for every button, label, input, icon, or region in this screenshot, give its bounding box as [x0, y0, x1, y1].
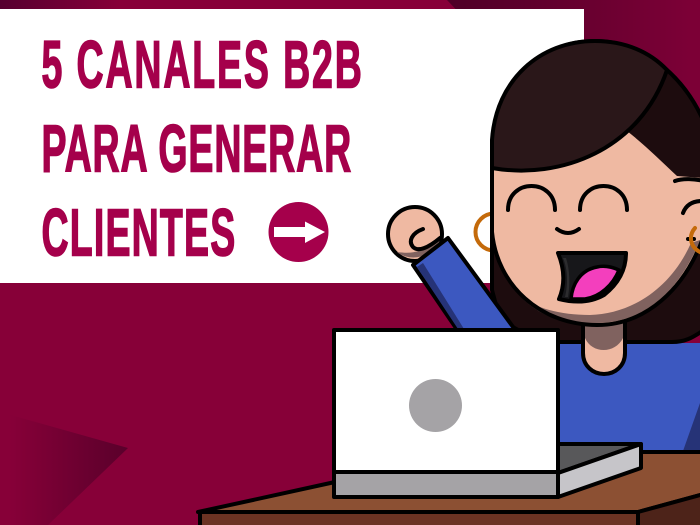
face shadow	[520, 240, 700, 323]
desk side	[638, 494, 700, 525]
raised arm	[413, 238, 516, 331]
laptop lid	[334, 330, 558, 472]
eye right	[580, 186, 627, 210]
face	[492, 120, 700, 325]
left earring	[476, 214, 512, 250]
laptop side	[558, 444, 641, 497]
keyboard deck	[558, 444, 641, 473]
title: PARA GENERAR	[42, 111, 351, 186]
face outline	[492, 168, 700, 325]
background accent: top left	[0, 0, 120, 10]
fringe	[492, 41, 667, 171]
laptop logo	[409, 379, 462, 432]
laptop base	[334, 472, 558, 497]
torso	[540, 343, 700, 453]
title: CLIENTES	[42, 195, 235, 270]
ear	[675, 179, 700, 239]
icon: arrow button	[268, 202, 328, 262]
nose	[557, 229, 579, 233]
background accent: bottom left triangle	[0, 412, 128, 525]
title panel	[0, 9, 584, 283]
background accent: top right dark shape	[447, 0, 700, 140]
desk	[198, 452, 700, 525]
character	[388, 41, 700, 453]
laptop	[334, 330, 641, 497]
desk top	[198, 452, 700, 512]
neck	[583, 322, 625, 374]
tongue	[571, 266, 619, 299]
mouth	[558, 253, 626, 302]
hair back	[492, 41, 700, 342]
head	[492, 41, 700, 325]
desk front	[200, 512, 638, 525]
title: 5 CANALES B2B	[42, 27, 362, 102]
eye left	[508, 186, 555, 210]
right earring	[691, 228, 700, 253]
title	[42, 27, 362, 270]
fist	[388, 207, 442, 261]
